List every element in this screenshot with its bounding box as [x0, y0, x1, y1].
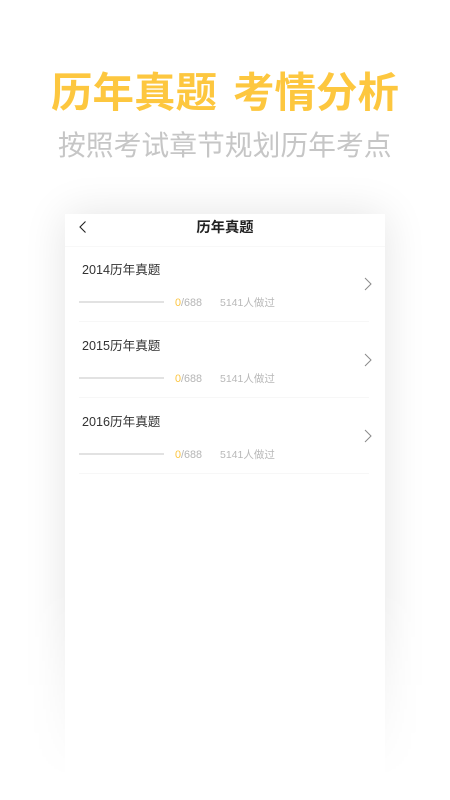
- row name: 2016历年真题: [82, 415, 160, 429]
- title: 历年真题 考情分析: [51, 69, 399, 116]
- page title: 历年真题: [196, 220, 254, 236]
- phone screen panel: [65, 214, 385, 800]
- row name: 2014历年真题: [82, 263, 160, 277]
- participants: 5141人做过: [220, 449, 275, 461]
- list row: 2015: [79, 339, 372, 385]
- icon: back arrow: [79, 221, 86, 233]
- list row: 2016: [79, 415, 372, 461]
- progress count: 0/688: [175, 449, 202, 461]
- participants: 5141人做过: [220, 297, 275, 309]
- icon: chevron: [364, 354, 372, 366]
- progress bar: [79, 301, 164, 303]
- participants: 5141人做过: [220, 373, 275, 385]
- progress bar: [79, 453, 164, 455]
- row name: 2015历年真题: [82, 339, 160, 353]
- navigation bar: [65, 214, 385, 247]
- subtitle: 按照考试章节规划历年考点: [58, 130, 392, 161]
- progress bar: [79, 377, 164, 379]
- icon: chevron: [364, 278, 372, 290]
- progress count: 0/688: [175, 373, 202, 385]
- list row: 2014: [79, 263, 372, 309]
- progress count: 0/688: [175, 297, 202, 309]
- icon: chevron: [364, 430, 372, 442]
- card shadow: [55, 204, 395, 665]
